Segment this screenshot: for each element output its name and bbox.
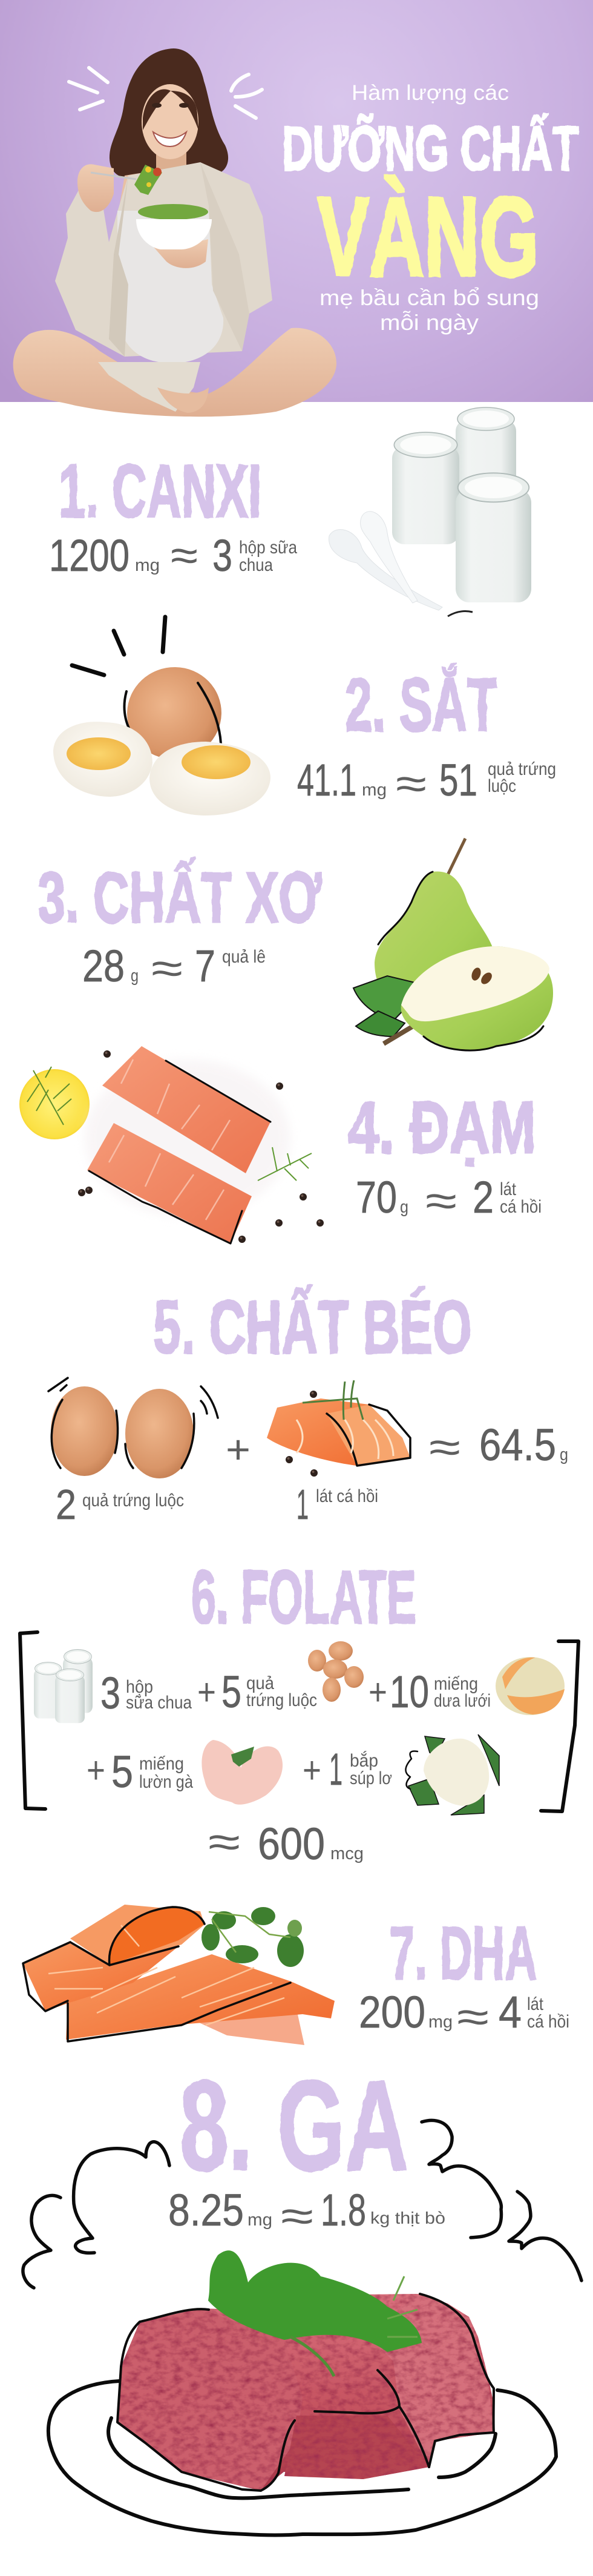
title intro: Hàm lượng các [352,81,509,105]
section 2: sắt [53,617,556,815]
label: 1 lát cá hồi: 1 [296,1481,309,1528]
equation: canxi: 3 [212,530,232,581]
equation: chất xơ: g [131,966,139,986]
header purple background [0,0,593,402]
result: folate: ≈ [208,1818,240,1866]
equation: canxi: ≈ [171,532,198,580]
illustration: cloud outline [23,2120,582,2288]
result: folate: mcg [330,1844,364,1863]
section 1: canxi [49,407,531,616]
item: 5 quả trứng luộc [197,1641,364,1717]
equation: dha: mg [428,2012,453,2032]
header panel [0,0,593,417]
item: 5 miếng lườn gà: + [87,1750,105,1791]
equation: sắt: 41.1 [297,755,356,805]
equation: sắt: quả trứng [488,759,556,779]
item: 10 miếng dưa lưới: + [369,1672,387,1713]
section 6: folate [20,1556,578,1869]
equation: canxi: chua [239,555,273,575]
equation: đạm: 2 [473,1172,494,1222]
item: 3 hộp sữa chua: sữa chua [126,1693,192,1713]
section 5: chất béo [48,1285,568,1528]
item: 1 bắp súp lơ: bắp [350,1751,378,1771]
heading: đạm: 4. ĐẠM [348,1086,536,1168]
equation: chất xơ: 28 [82,941,125,991]
item: 1 bắp súp lơ: + [303,1750,321,1791]
label: 2 quả trứng luộc: 2 [56,1481,76,1528]
equation: sắt: 51 [439,755,477,805]
equation: chất xơ: quả lê [222,947,266,967]
equation: đạm: lát [500,1179,517,1199]
item: 5 miếng lườn gà [87,1740,283,1805]
photo: salmon slice with rosemary [267,1380,410,1477]
heading: ga: 8. GA [180,2054,408,2197]
equation: sắt: luộc [488,776,516,796]
equation: sắt [297,755,556,808]
item: 3 hộp sữa chua [34,1650,192,1723]
photo: salmon fillets with lemon and dill [19,1046,324,1244]
equation: đạm: cá hồi [500,1197,542,1217]
equation: chất xơ [82,941,266,993]
item: 5 quả trứng luộc: + [197,1672,216,1713]
subtitle line 2: mỗi ngày [380,310,479,335]
item: 10 miếng dưa lưới: dưa lưới [434,1691,491,1711]
photo: pregnant woman eating salad [13,48,336,417]
photo: beef with parsley [117,2250,494,2491]
left bracket [20,1632,45,1809]
section 8: ga [23,2054,582,2535]
plus sign: + [226,1427,251,1472]
equation: dha: cá hồi [527,2012,569,2032]
equation: chất xơ: ≈ [151,944,183,993]
photo: pears and leaves [353,838,553,1050]
label: 1 lát cá hồi [296,1481,378,1528]
item: 5 miếng lườn gà: lườn gà [139,1772,193,1792]
equation: ga: ≈ [281,2192,313,2241]
equation: ga: kg thịt bò [370,2209,445,2227]
item: 5 miếng lườn gà: miếng [139,1754,184,1774]
subtitle line 1: mẹ bầu cần bổ sung [319,285,539,310]
result: folate: 600 [258,1819,325,1869]
item: 1 bắp súp lơ: 1 [329,1744,342,1794]
item: 3 hộp sữa chua: hộp [126,1677,153,1697]
illustration: eggs with spark lines [53,617,270,815]
equation: chất béo total [429,1420,568,1472]
equation: ga: 1.8 [321,2185,366,2235]
equation: canxi: hộp sữa [239,538,297,558]
equation: chất béo total: ≈ [429,1423,460,1472]
label: 1 lát cá hồi: lát cá hồi [316,1486,378,1506]
item: 1 bắp súp lơ [303,1734,499,1815]
photo: salmon fillets with herbs [23,1905,335,2045]
equation: dha: 200 [359,1987,425,2037]
label: 2 quả trứng luộc [56,1481,184,1528]
equation: dha: lát [527,1994,544,2014]
equation: chất xơ: 7 [195,941,215,991]
heading: canxi: 1. CANXI [59,450,261,533]
label: 2 quả trứng luộc: quả trứng luộc [82,1491,184,1510]
equation: sắt: ≈ [396,760,427,808]
equation: chất béo total: g [560,1445,568,1464]
decorative white spark lines [69,68,262,118]
equation: ga: 8.25 [168,2185,244,2235]
item: 1 bắp súp lơ: súp lơ [350,1768,392,1788]
equation: đạm: g [400,1197,408,1217]
equation: canxi: 1200 [49,530,129,581]
item: 5 quả trứng luộc: quả [246,1673,274,1693]
section 7: dha [23,1905,569,2045]
equation: canxi [49,530,297,581]
item: 5 quả trứng luộc: 5 [221,1667,241,1717]
equation: đạm: ≈ [425,1177,457,1225]
section 4: đạm [19,1046,542,1244]
equation: đạm: 70 [356,1172,397,1222]
photo: yogurt jars and spoons [329,407,531,616]
section 3: chất xơ [38,838,553,1050]
equation: dha: ≈ [457,1993,489,2041]
result: folate [208,1818,364,1869]
equation: đạm [356,1172,542,1225]
equation: dha [359,1987,569,2041]
item: 10 miếng dưa lưới: miếng [434,1674,478,1694]
equation: dha: 4 [499,1987,522,2037]
heading: folate: 6. FOLATE [191,1556,416,1639]
item: 10 miếng dưa lưới [369,1657,565,1717]
heading: sắt: 2. SẮT [345,663,497,747]
item: 10 miếng dưa lưới: 10 [390,1667,429,1717]
photo: two brown eggs [48,1378,218,1478]
equation: chất béo total: 64.5 [479,1420,556,1470]
illustration: plate outline [48,2381,556,2535]
item: 3 hộp sữa chua: 3 [100,1668,120,1718]
equation: canxi: mg [135,556,160,575]
right bracket [541,1641,578,1811]
equation: sắt: mg [362,780,387,800]
equation: ga: mg [247,2210,272,2230]
item: 5 quả trứng luộc: trứng luộc [246,1690,317,1710]
equation: ga [168,2185,445,2241]
item: 5 miếng lườn gà: 5 [111,1747,133,1797]
heading: chất xơ: 3. CHẤT XƠ [38,857,321,938]
